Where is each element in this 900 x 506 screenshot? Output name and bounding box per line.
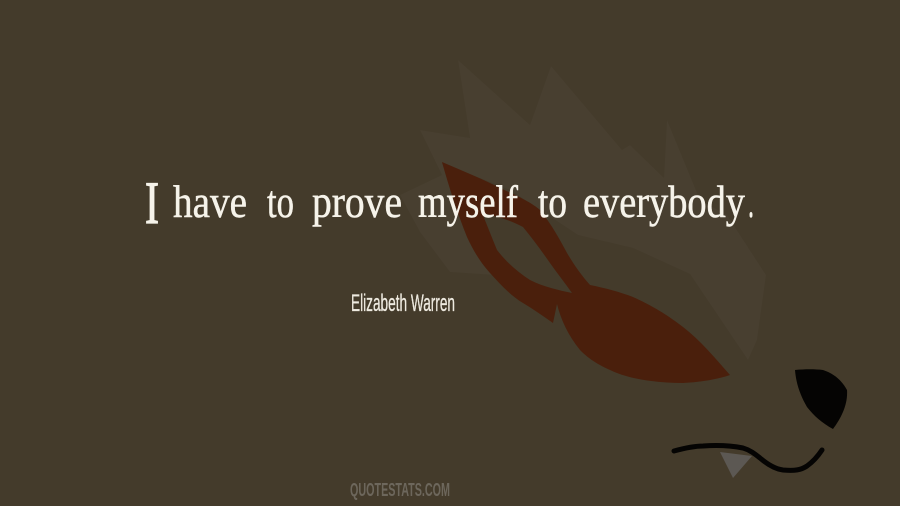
quote text: . [748,176,754,227]
quote text: myself [418,176,519,227]
quote text: to [267,176,294,227]
icon: mouth line [674,446,822,470]
author: Elizabeth Warren [351,290,455,317]
quote text: everybody [583,176,745,227]
icon: fur silhouette [400,60,766,360]
icon: nose [795,369,847,429]
icon: fang [720,452,752,478]
quote text: have [173,176,247,227]
quote text: to [538,176,567,227]
quote text: I [145,170,159,236]
icon: red mask [442,162,730,383]
quote text [145,170,754,236]
footer site name: QUOTESTATS.COM [350,480,450,500]
quote text: prove [312,176,402,227]
